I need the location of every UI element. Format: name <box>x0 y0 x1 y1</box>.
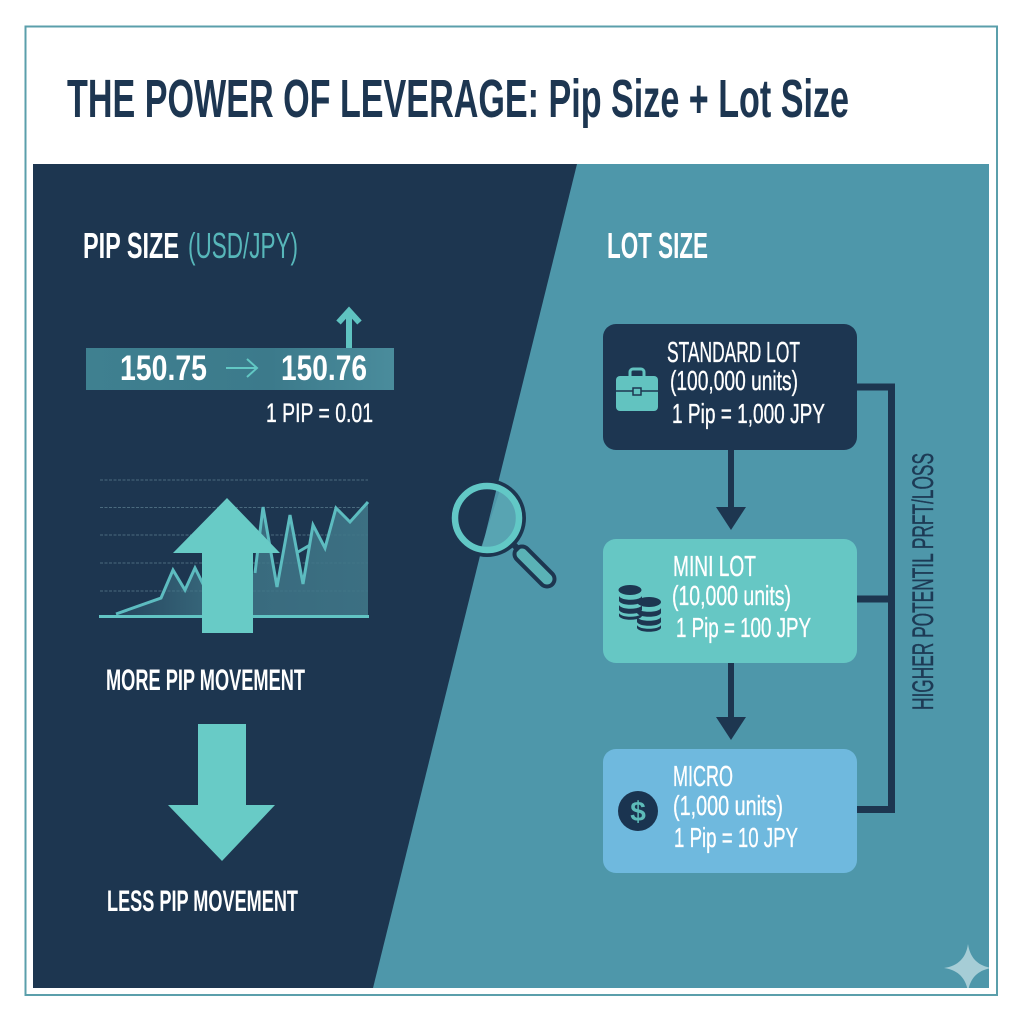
card: standard lot <box>603 324 857 450</box>
icon: magnifying glass <box>450 481 547 579</box>
icon: sparkle <box>944 944 989 988</box>
connector bracket <box>857 387 892 810</box>
heading: lot size: LOT SIZE <box>607 225 708 266</box>
icon: dollar coin <box>618 791 658 831</box>
arrow: standard to mini <box>716 450 746 530</box>
price bar: 150.76 <box>281 349 367 388</box>
heading: pip size: PIP SIZE <box>83 225 179 266</box>
label: more pip movement: MORE PIP MOVEMENT <box>106 664 305 697</box>
card: mini lot: (10,000 units) <box>672 580 791 611</box>
panel: pip size background <box>33 164 577 988</box>
icon: briefcase <box>616 369 658 411</box>
card: mini lot <box>603 539 857 663</box>
icon: dollar coin: $ <box>630 796 646 827</box>
pip value label: 1 PIP = 0.01 <box>266 398 373 428</box>
card: micro lot <box>603 749 857 873</box>
panel: lot size background <box>33 164 989 988</box>
card: standard lot: STANDARD LOT <box>667 337 800 369</box>
card: standard lot: (100,000 units) <box>670 365 798 396</box>
card: mini lot: 1 Pip = 100 JPY <box>676 612 811 643</box>
arrow: mini to micro <box>716 663 746 740</box>
card: micro lot: 1 Pip = 10 JPY <box>674 822 798 853</box>
icon: big down arrow <box>168 724 275 861</box>
price bar <box>86 348 394 390</box>
icon: coin stacks <box>618 585 661 632</box>
price bar: 150.75 <box>120 349 207 388</box>
icon: big up arrow <box>173 498 280 633</box>
heading: pip size <box>83 225 298 266</box>
heading: pip size: (USD/JPY) <box>188 225 298 266</box>
icon: small up arrow <box>338 310 360 348</box>
vertical label: higher potential profit/loss: HIGHER POTENTIL PRFT/LOSS <box>907 453 940 710</box>
card: standard lot: 1 Pip = 1,000 JPY <box>672 398 825 429</box>
card: micro lot: (1,000 units) <box>673 790 783 821</box>
card: mini lot: MINI LOT <box>673 551 756 583</box>
card: micro lot: MICRO <box>673 761 733 793</box>
line chart <box>99 480 369 618</box>
label: less pip movement: LESS PIP MOVEMENT <box>107 885 298 918</box>
